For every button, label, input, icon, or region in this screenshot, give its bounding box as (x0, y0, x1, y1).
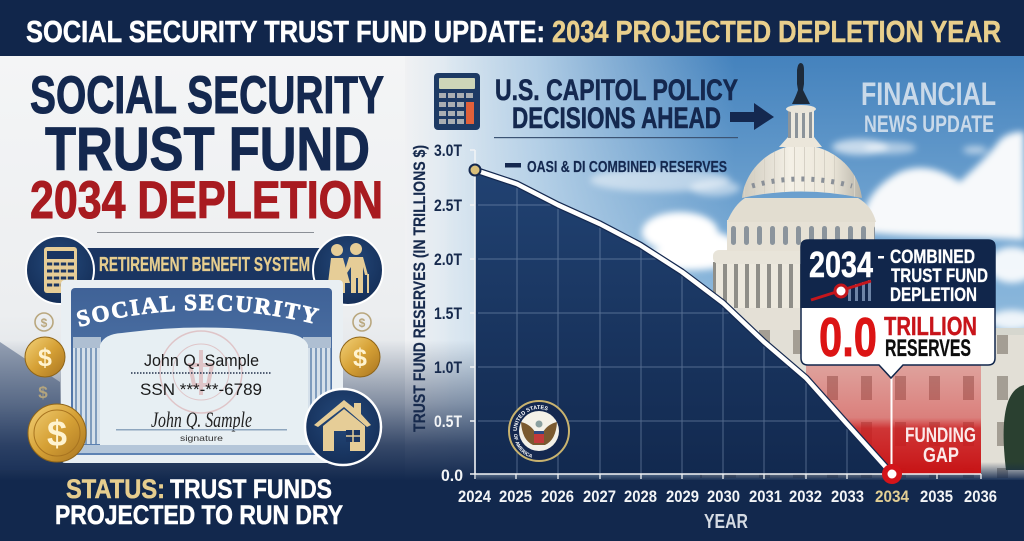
text: financial news update (861, 76, 996, 138)
reserves curve (475, 170, 892, 474)
card title: SOCIAL SECURITY (76, 294, 320, 326)
bottom fade right (476, 462, 1024, 541)
clouds (590, 132, 1024, 330)
callout label (890, 247, 988, 306)
y axis labels (434, 141, 463, 485)
heading: capitol policy: DECISIONS AHEAD (512, 102, 721, 135)
card: Social Security card: signature (180, 433, 223, 443)
dome of the Capitol (713, 63, 883, 308)
bottom fade left (0, 340, 476, 541)
callout sparkline (811, 280, 871, 301)
x axis labels: 2026 (541, 487, 574, 506)
title: left panel: TRUST FUND (45, 115, 370, 183)
icon: calculator circle (26, 236, 94, 304)
panel: sky and Capitol photo (405, 56, 1024, 486)
callout: 2034 depletion: RESERVES (885, 335, 971, 362)
callout: 2034 depletion (801, 240, 995, 378)
depletion point (882, 464, 902, 484)
y axis labels: 2.0T (434, 250, 462, 269)
icon: gold coins: $ (359, 316, 366, 330)
y axis labels: 0.0 (441, 466, 463, 485)
start point (470, 164, 480, 176)
header title: SOCIAL SECURITY TRUST FUND UPDATE: (26, 14, 545, 49)
funding gap label (905, 424, 976, 467)
x axis labels: 2031 (749, 487, 782, 506)
callout value: 0.0 (819, 306, 877, 368)
title: left panel: 2034 DEPLETION (30, 171, 383, 230)
card columns (73, 337, 331, 444)
x axis labels (458, 487, 997, 506)
x axis labels: 2025 (499, 487, 532, 506)
callout label: TRUST FUND (891, 266, 988, 287)
funding gap label: FUNDING (905, 424, 976, 447)
panel: header bar (0, 0, 1024, 56)
y axis labels: 0.5T (434, 412, 462, 431)
y axis title: TRUST FUND RESERVES (IN TRILLIONS $) (410, 145, 429, 432)
text: status: STATUS: (66, 474, 165, 504)
x axis labels: 2029 (666, 487, 699, 506)
callout year: 2034 (809, 244, 873, 285)
callout: 2034 depletion: TRILLION (884, 311, 977, 341)
x axis labels: 2034 (875, 487, 909, 506)
y axis labels: 3.0T (434, 141, 462, 160)
x axis labels: 2032 (789, 487, 822, 506)
x axis labels: 2027 (583, 487, 616, 506)
x axis labels: 2035 (920, 487, 953, 506)
grid lines (478, 184, 850, 474)
depletion pointer line (890, 366, 892, 474)
x axis labels: 2033 (831, 487, 864, 506)
y axis labels: 1.5T (434, 304, 462, 323)
icon: elderly couple circle (313, 235, 383, 305)
title: left panel (30, 66, 384, 233)
icon: US seal: OF AMERICA (514, 434, 532, 458)
text: status (55, 474, 343, 530)
navy area under curve (475, 170, 892, 474)
icon: gold coins: $ (41, 316, 48, 330)
icon: calculator (434, 73, 480, 130)
arrow: toward Capitol (730, 103, 774, 130)
panel: left background (0, 56, 420, 486)
icon: gold coins: $ (38, 344, 52, 372)
x axis labels: 2036 (964, 487, 997, 506)
card signature: John Q. Sample (151, 407, 252, 432)
x axis labels: 2030 (707, 487, 740, 506)
red funding gap area (806, 340, 981, 474)
y axis labels: 1.0T (434, 358, 462, 377)
banner: retirement benefit system: RETIREMENT BENEFIT SYSTEM (99, 254, 310, 276)
x axis labels: 2024 (458, 487, 491, 506)
card: Social Security card (61, 280, 343, 463)
text: status: PROJECTED TO RUN DRY (55, 500, 343, 530)
icon: gold coins: $ (47, 413, 67, 454)
title: left panel: SOCIAL SECURITY (30, 66, 384, 125)
icon: gold coins: $ (38, 383, 48, 402)
icon: gold coins: $ (353, 344, 367, 372)
card SSN: SSN ***-**-6789 (140, 380, 262, 399)
funding gap label: GAP (923, 444, 959, 467)
card seal watermark (160, 331, 242, 413)
callout label: COMBINED (890, 247, 975, 268)
axes (470, 150, 981, 474)
x axis title: YEAR (704, 511, 748, 533)
callout label: DEPLETION (890, 285, 977, 306)
heading: capitol policy (494, 74, 738, 138)
icon: house circle (305, 389, 381, 465)
banner: retirement benefit system (85, 248, 325, 280)
icon: US seal (508, 400, 570, 462)
icon: gold coins (25, 313, 380, 462)
y axis labels: 2.5T (434, 196, 462, 215)
card center panel (100, 328, 308, 445)
chart: trust fund reserves line chart (470, 150, 981, 484)
x axis labels: 2028 (624, 487, 657, 506)
text: status: TRUST FUNDS (170, 474, 332, 504)
building base and wings (700, 306, 1024, 478)
legend: OASI & DI COMBINED RESERVES (527, 159, 727, 176)
heading: capitol policy: U.S. CAPITOL POLICY (495, 74, 738, 107)
icon: US seal: UNITED STATES (513, 405, 548, 431)
card name: John Q. Sample (144, 351, 259, 370)
